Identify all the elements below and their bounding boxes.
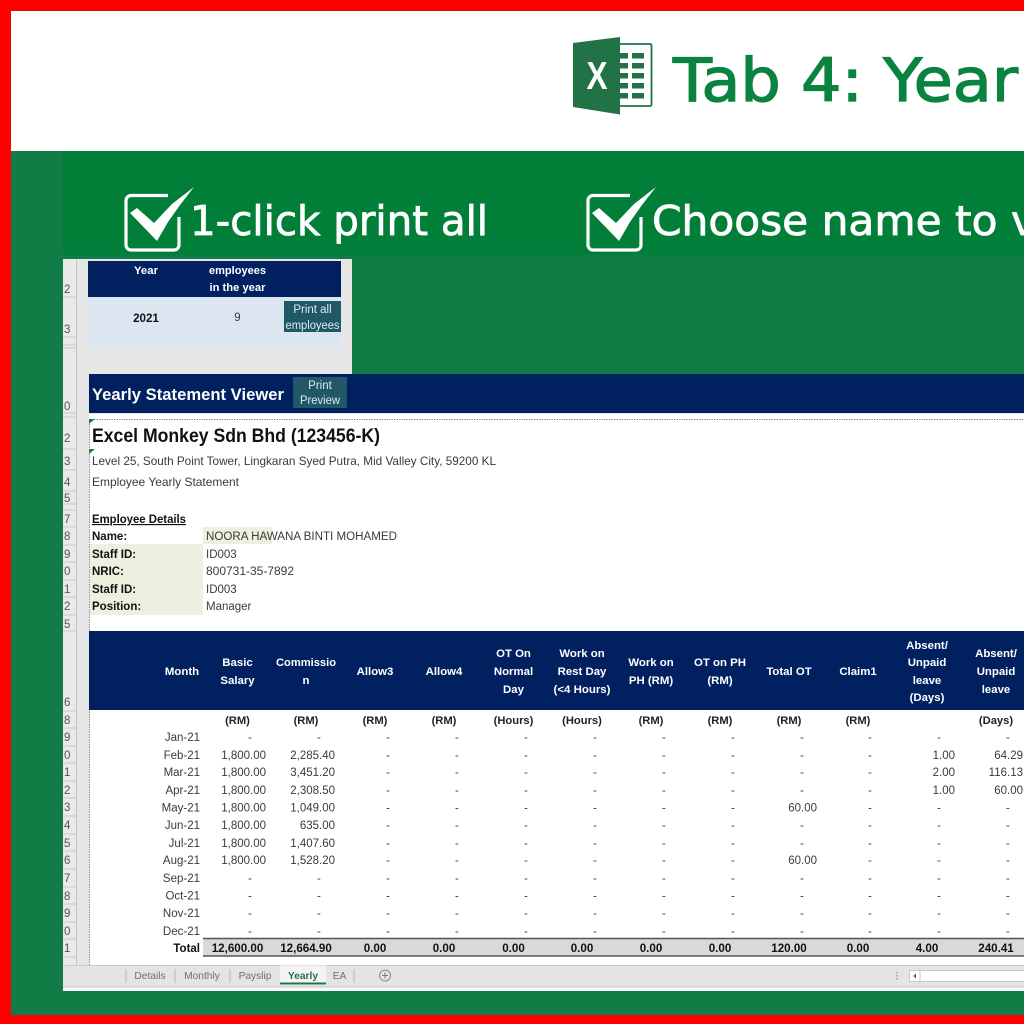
table values: 1,407.60 <box>290 838 335 850</box>
button: print all employees: Print all <box>293 304 332 316</box>
table values <box>221 732 1023 938</box>
totals row: 0.00 <box>433 942 455 955</box>
table values: 116.13 <box>989 767 1023 779</box>
table values: 1.00 <box>933 785 955 797</box>
totals row: 0.00 <box>847 942 869 955</box>
table values: 1,800.00 <box>221 785 266 797</box>
table header: Month <box>165 666 199 678</box>
table values: 1,800.00 <box>221 767 266 779</box>
row header column: 8 <box>64 891 70 903</box>
row header column: 2 <box>64 284 70 296</box>
table header: Allow4 <box>426 666 463 678</box>
table header: Normal <box>494 666 533 678</box>
row header column: 1 <box>64 767 70 779</box>
table values: 1,049.00 <box>290 802 335 814</box>
units row: (RM) <box>639 715 664 727</box>
month labels: Jun-21 <box>165 820 200 832</box>
table values: 635.00 <box>300 820 335 832</box>
table header: Work on <box>628 657 674 669</box>
viewer banner: Yearly Statement Viewer <box>92 386 285 404</box>
row header column: 2 <box>64 601 70 613</box>
summary table: in the year <box>210 282 266 294</box>
sheet tabs bar: Monthly <box>184 971 221 982</box>
row header column: 1 <box>64 943 70 955</box>
table header: Claim1 <box>839 666 877 678</box>
totals row: 0.00 <box>502 942 525 955</box>
table values: ------------ <box>248 908 1010 920</box>
table header: Unpaid <box>977 666 1015 678</box>
totals row: 12,600.00 <box>212 942 263 955</box>
units row: (Hours) <box>562 715 602 727</box>
table values: ------------ <box>248 732 1010 744</box>
month labels: Apr-21 <box>165 785 200 797</box>
table header: leave <box>913 675 941 687</box>
totals row <box>173 938 1024 956</box>
button: print all employees <box>284 301 341 332</box>
row header column: 9 <box>64 549 70 561</box>
company details: Employee Yearly Statement <box>92 475 240 489</box>
totals row: 240.41 <box>978 942 1014 955</box>
table header <box>89 631 1024 710</box>
month labels: Oct-21 <box>165 890 200 902</box>
units row <box>225 715 1013 727</box>
row header column: 3 <box>64 456 70 468</box>
spreadsheet window: upper grey area <box>63 259 352 375</box>
table values: 2,285.40 <box>290 750 335 762</box>
row header column: 0 <box>64 401 70 413</box>
sheet tabs bar: Payslip <box>239 971 272 982</box>
company details <box>92 426 496 489</box>
month labels: Nov-21 <box>163 908 200 920</box>
table header: (Days) <box>910 692 945 704</box>
month labels: Sep-21 <box>163 873 200 885</box>
row header column: 0 <box>64 750 70 762</box>
button: print all employees: employees <box>286 320 340 332</box>
summary table: 9 <box>234 312 241 324</box>
row header column: 5 <box>64 493 70 505</box>
table values: -------- <box>386 785 872 797</box>
units row: (RM) <box>777 715 802 727</box>
table header: Absent/ <box>975 648 1018 660</box>
units row: (RM) <box>708 715 733 727</box>
table values: 1,800.00 <box>221 838 266 850</box>
employee details: Staff ID: <box>92 549 136 561</box>
units row: (RM) <box>225 715 250 727</box>
sheet tabs bar: Details <box>134 971 166 982</box>
row header column: 7 <box>64 873 70 885</box>
totals row: Total <box>173 943 200 955</box>
employee details <box>90 514 397 615</box>
button: print preview: Preview <box>300 395 341 407</box>
scrollbar <box>897 970 1024 982</box>
spreadsheet window: sheet area <box>63 374 1024 991</box>
row header column: 7 <box>64 514 70 526</box>
employee details: Name: <box>92 531 127 543</box>
row header column: 3 <box>64 324 70 336</box>
button: print preview: Print <box>308 380 333 392</box>
table values: 64.29 <box>994 750 1023 762</box>
table header: OT on PH <box>694 657 746 669</box>
row header column: 2 <box>64 433 70 445</box>
totals row: 0.00 <box>571 942 593 955</box>
icon: checkbox <box>126 187 194 250</box>
employee details: ID003 <box>206 584 237 596</box>
units row: (Days) <box>979 715 1013 727</box>
table header: Basic <box>222 657 253 669</box>
month labels: Jan-21 <box>165 732 200 744</box>
table header: Absent/ <box>906 640 949 652</box>
totals row: 12,664.90 <box>280 942 332 955</box>
sheet tabs bar: Yearly <box>288 971 318 982</box>
button: print preview <box>293 377 347 408</box>
sheet tabs bar: EA <box>333 971 346 982</box>
table values: ------------ <box>248 890 1010 902</box>
month labels: Dec-21 <box>163 926 200 938</box>
table header: Total OT <box>766 666 812 678</box>
row header column: 8 <box>64 715 70 727</box>
totals row: 0.00 <box>709 942 731 955</box>
row header column: 4 <box>64 820 71 832</box>
table values: 3,451.20 <box>290 767 335 779</box>
row header column: 6 <box>64 697 70 709</box>
row header column: 2 <box>64 785 70 797</box>
viewer banner <box>89 374 1024 413</box>
table values: ------ <box>386 855 735 867</box>
table values: --- <box>868 802 1010 814</box>
icon: excel logo <box>573 37 652 114</box>
row header column: 8 <box>64 531 70 543</box>
totals row: 0.00 <box>640 942 662 955</box>
table header: Salary <box>220 675 255 687</box>
month labels: Jul-21 <box>169 838 200 850</box>
table values: 1,528.20 <box>290 855 335 867</box>
table header: (<4 Hours) <box>554 684 611 696</box>
table values: 1,800.00 <box>221 820 266 832</box>
checklist item: choose name <box>588 187 1024 250</box>
month labels <box>162 732 200 938</box>
row header column: 9 <box>64 732 70 744</box>
summary table <box>88 261 341 346</box>
checklist item: 1-click print all: 1-click print all <box>190 197 488 245</box>
sheet tabs bar <box>63 965 1024 991</box>
table values: 1,800.00 <box>221 802 266 814</box>
table values: --- <box>868 855 1010 867</box>
title: Tab 4: Year <box>672 46 1018 116</box>
table values: ------------ <box>248 873 1010 885</box>
company details: Excel Monkey Sdn Bhd (123456-K) <box>92 426 380 447</box>
table values: 60.00 <box>788 802 817 814</box>
table header: Work on <box>559 648 605 660</box>
table values: -------- <box>386 767 872 779</box>
green heading band <box>63 151 1024 255</box>
table header: Allow3 <box>357 666 393 678</box>
employee details: NRIC: <box>92 566 124 578</box>
table values: 60.00 <box>994 785 1023 797</box>
icon: checkbox <box>588 187 656 250</box>
table values: 2.00 <box>933 767 955 779</box>
table values: 2,308.50 <box>290 785 335 797</box>
table header: OT On <box>496 648 531 660</box>
employee details: Staff ID: <box>92 584 136 596</box>
month labels: Feb-21 <box>164 750 200 762</box>
row header column: 4 <box>64 477 71 489</box>
row header column: 3 <box>64 802 70 814</box>
summary table: 2021 <box>133 312 159 325</box>
totals row: 4.00 <box>916 942 938 955</box>
row header column: 5 <box>64 838 70 850</box>
table values: 60.00 <box>788 855 817 867</box>
table header: Rest Day <box>558 666 607 678</box>
table header: PH (RM) <box>629 675 673 687</box>
units row: (RM) <box>432 715 457 727</box>
icon: add sheet <box>380 970 390 981</box>
employee details: Position: <box>92 601 141 613</box>
icon: excel logo: X <box>586 55 608 98</box>
totals row: 120.00 <box>771 942 807 955</box>
company details: Level 25, South Point Tower, Lingkaran Syed Putra, Mid Valley City, 59200 KL <box>92 454 496 468</box>
table header: Commissio <box>276 657 336 669</box>
row header column: 5 <box>64 619 70 631</box>
employee details: NOORA HAWANA BINTI MOHAMED <box>206 531 397 543</box>
summary table: Year <box>134 265 159 277</box>
row header column: 9 <box>64 908 70 920</box>
month labels: May-21 <box>162 802 200 814</box>
table values: 1,800.00 <box>221 855 266 867</box>
employee details: 800731-35-7892 <box>206 566 294 578</box>
row header column <box>63 259 77 965</box>
table values: ---------- <box>386 838 1010 850</box>
month labels: Aug-21 <box>163 855 200 867</box>
row header column: 0 <box>64 926 70 938</box>
totals row: 0.00 <box>364 942 386 955</box>
table values: -------- <box>386 750 872 762</box>
table values: 1,800.00 <box>221 750 266 762</box>
row header column: 6 <box>64 855 70 867</box>
units row: (Hours) <box>494 715 534 727</box>
table values: ------ <box>386 802 735 814</box>
table header: n <box>303 675 310 687</box>
summary table: employees <box>209 265 266 277</box>
table values: ------------ <box>248 926 1010 938</box>
table header: (RM) <box>707 675 733 687</box>
table header: Unpaid <box>908 657 946 669</box>
row header column: 0 <box>64 566 70 578</box>
month labels: Mar-21 <box>164 767 200 779</box>
table header: leave <box>982 684 1010 696</box>
units row: (RM) <box>294 715 319 727</box>
table values: 1.00 <box>933 750 955 762</box>
table values: ---------- <box>386 820 1010 832</box>
table header: Day <box>503 684 525 696</box>
units row: (RM) <box>363 715 388 727</box>
checklist item: choose name: Choose name to v <box>652 197 1024 245</box>
checklist item: 1-click print all <box>126 187 488 250</box>
employee details: Manager <box>206 601 252 613</box>
employee details: Employee Details <box>92 514 186 526</box>
row header column: 1 <box>64 584 70 596</box>
employee details: ID003 <box>206 549 237 561</box>
units row: (RM) <box>846 715 871 727</box>
